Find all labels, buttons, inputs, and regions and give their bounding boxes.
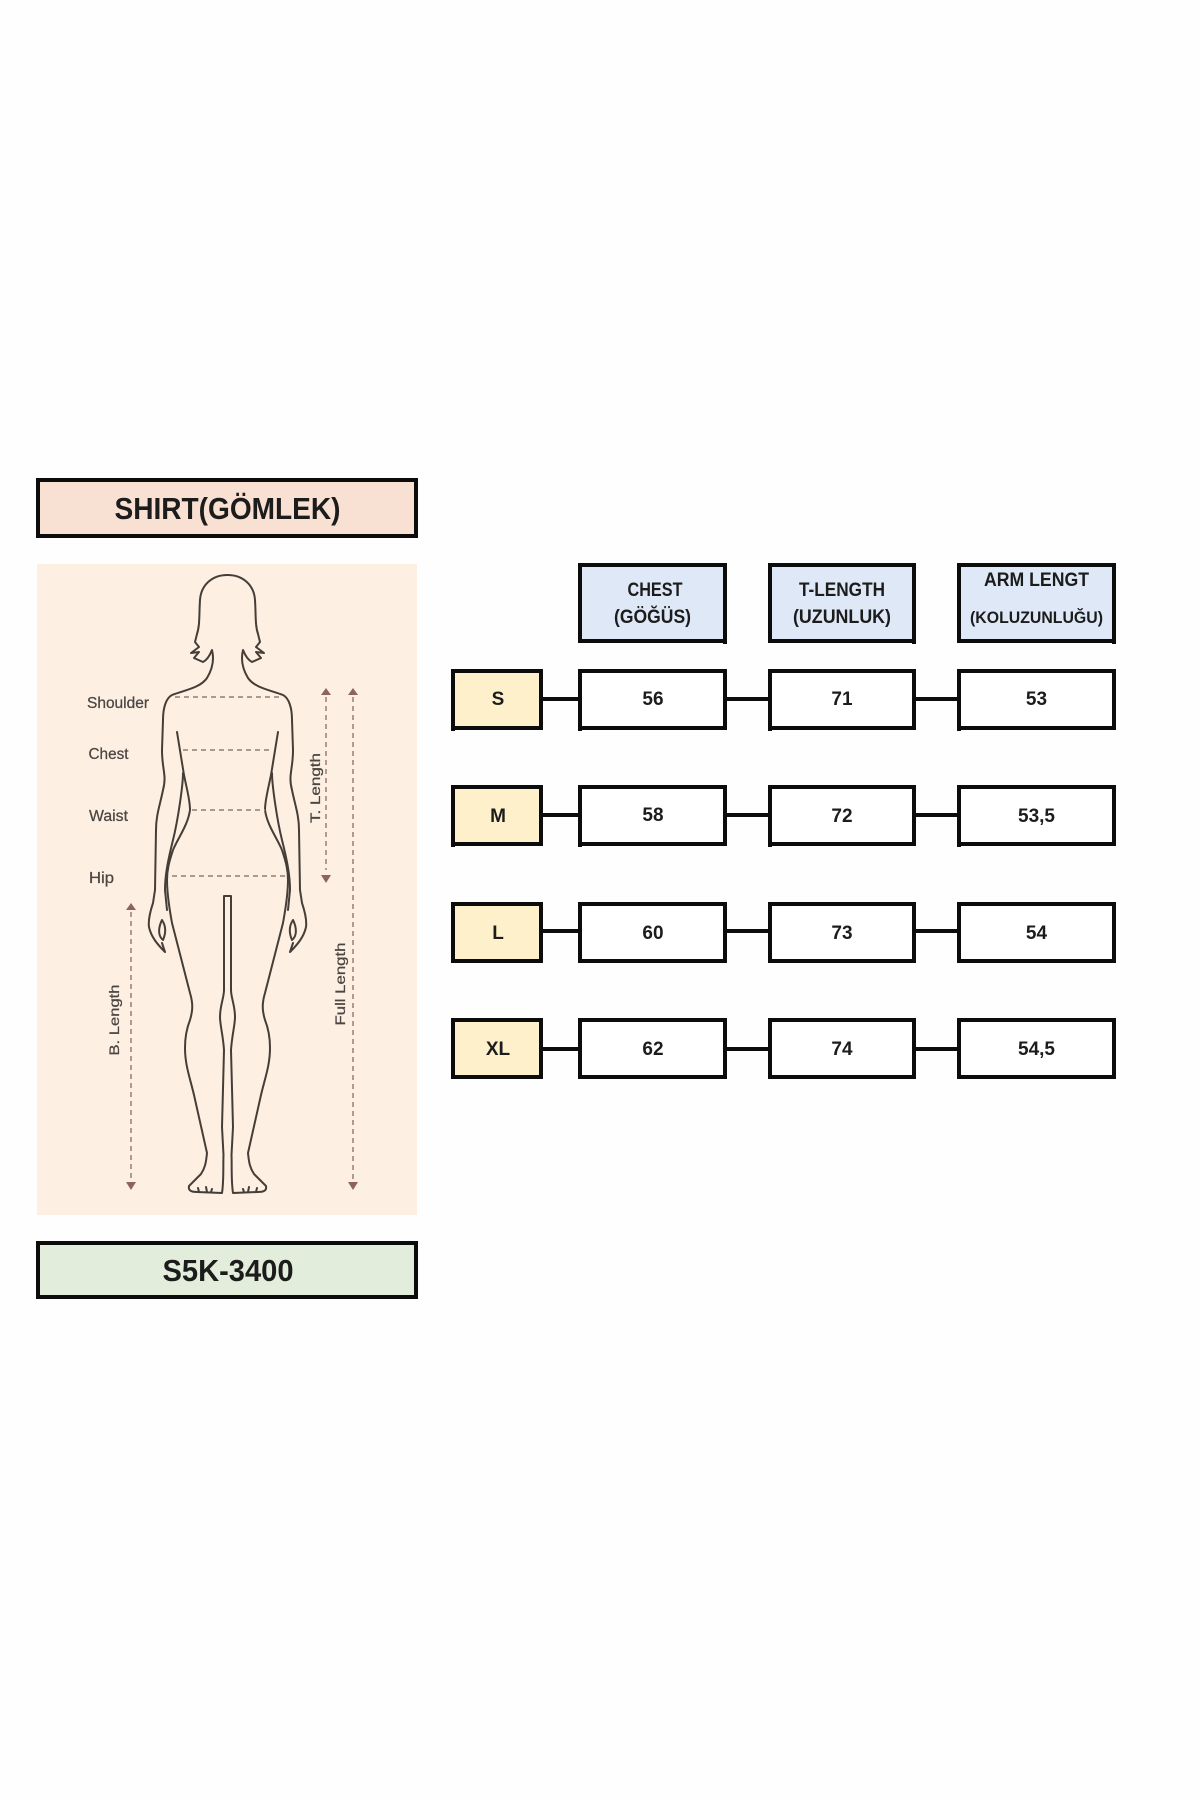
column header: chest: (GÖĞÜS) [614, 606, 691, 628]
column header: arm length [959, 565, 1114, 644]
arrow: b length [106, 903, 136, 1190]
row: size L: 54 [1026, 923, 1047, 944]
row: size S: 56 [642, 689, 664, 710]
row: size S [453, 671, 1114, 731]
label: shoulder: Shoulder [87, 695, 149, 712]
row: size XL: 62 [642, 1039, 664, 1060]
column header: arm length: (KOLUZUNLUĞU) [970, 608, 1103, 627]
row: size XL: XL [486, 1039, 511, 1060]
title: shirt [38, 480, 416, 536]
label: hip: Hip [89, 870, 114, 887]
row: size M: 72 [831, 806, 853, 827]
arrow: full length: Full Length [332, 942, 348, 1026]
column header: chest: CHEST [628, 580, 683, 601]
arrow: b length: B. Length [106, 984, 122, 1056]
column header: arm length: ARM LENGT [984, 570, 1089, 591]
row: size L: L [492, 923, 504, 944]
product code [38, 1243, 416, 1297]
title: shirt: SHIRT(GÖMLEK) [114, 491, 340, 526]
row: size S: S [492, 689, 504, 710]
row: size M: M [490, 806, 506, 827]
row: size XL: 74 [831, 1039, 853, 1060]
row: size S: 53 [1026, 689, 1047, 710]
column header: t-length: (UZUNLUK) [793, 607, 891, 628]
row: size M: 53,5 [1018, 806, 1055, 827]
column header: t-length: T-LENGTH [799, 580, 885, 601]
row: size L: 60 [642, 923, 664, 944]
column header: t-length [770, 565, 914, 644]
label: waist: Waist [89, 808, 129, 825]
row: size XL: 54,5 [1018, 1039, 1055, 1060]
row: size L [453, 904, 1114, 961]
arrow: t length: T. Length [307, 753, 323, 823]
arrow: t length [307, 688, 331, 883]
arrow: full length [332, 688, 358, 1190]
product code: S5K-3400 [162, 1253, 294, 1288]
label: chest: Chest [88, 746, 129, 763]
row: size M [453, 787, 1114, 847]
icon: body outline [149, 575, 306, 1193]
row: size XL [453, 1020, 1114, 1077]
row: size L: 73 [831, 923, 853, 944]
column header: chest [580, 565, 725, 644]
row: size S: 71 [831, 689, 853, 710]
panel: body measurement diagram [37, 564, 417, 1215]
row: size M: 58 [642, 805, 664, 826]
